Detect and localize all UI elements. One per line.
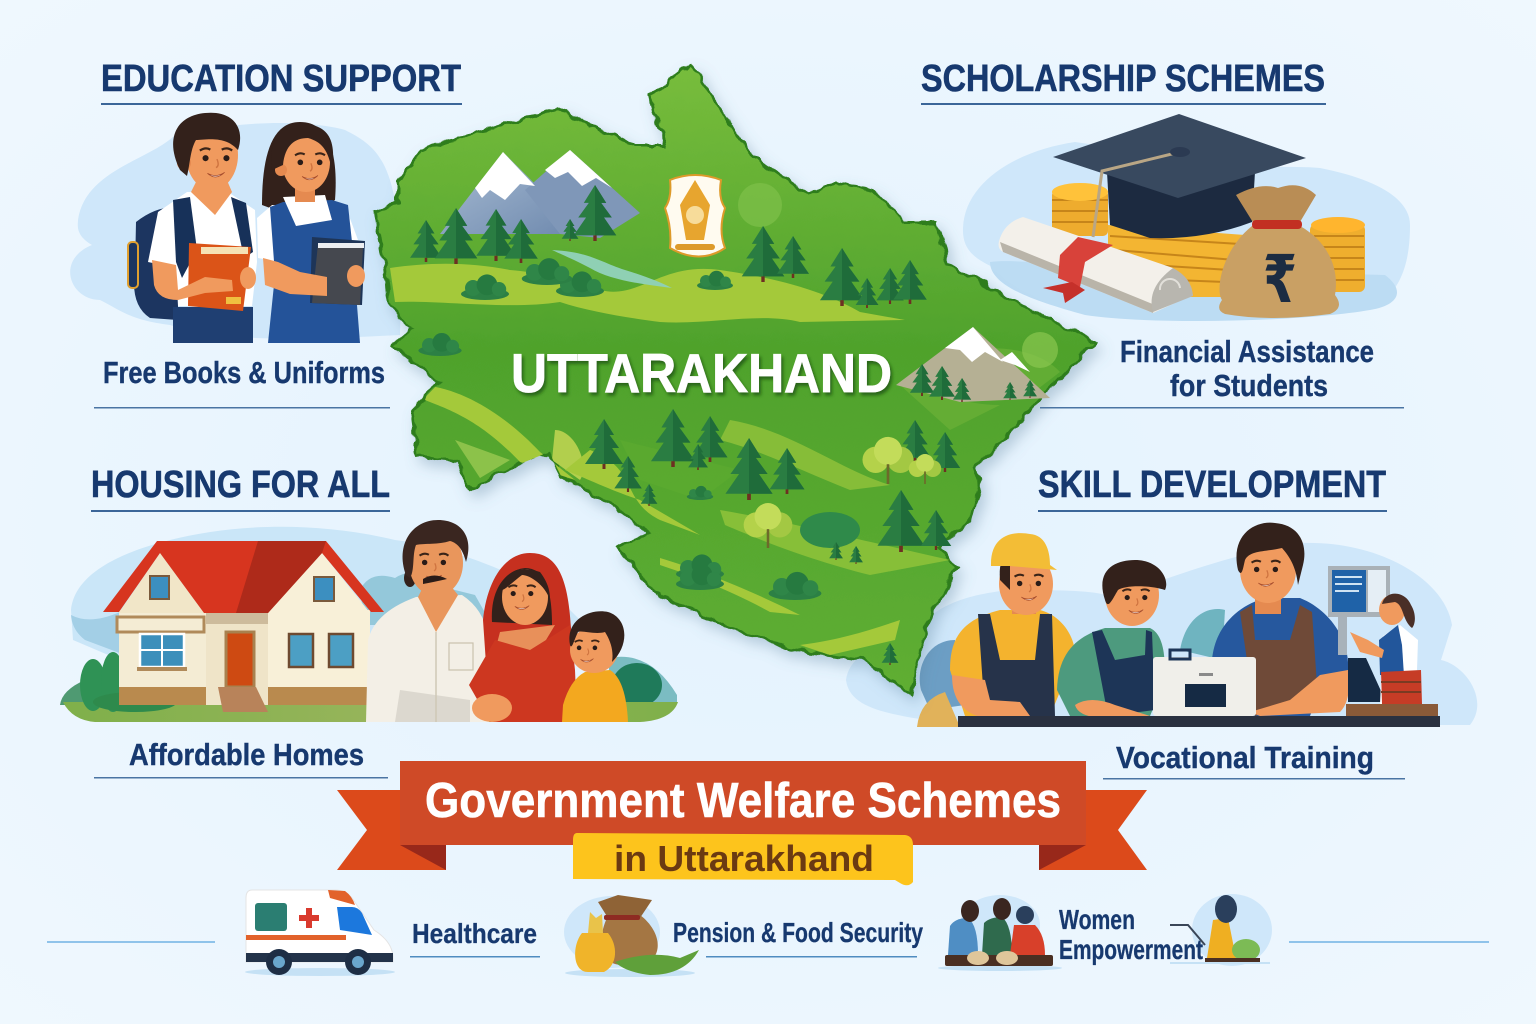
caption: Financial Assistance: [1120, 334, 1374, 369]
woman in red sari: [469, 553, 577, 722]
map of Uttarakhand: [375, 64, 1094, 695]
child: [562, 611, 628, 722]
ribbon folds: [400, 845, 1086, 870]
panel: scholarship schemes: [921, 58, 1410, 408]
background blob: [963, 142, 1410, 300]
trainer: [1212, 523, 1349, 716]
heading: SCHOLARSHIP SCHEMES: [921, 58, 1325, 100]
icon: ambulance: [245, 890, 395, 976]
shrubs: [917, 609, 1225, 727]
heading: HOUSING FOR ALL: [91, 464, 390, 506]
heading: SKILL DEVELOPMENT: [1038, 464, 1386, 506]
diploma scroll: [999, 217, 1193, 313]
map title: UTTARAKHAND: [511, 342, 892, 404]
sub-banner: in Uttarakhand: [614, 838, 874, 879]
background blob: [71, 527, 600, 660]
icon: people group: [938, 895, 1062, 971]
map landmass: [375, 64, 1094, 695]
forest north: [410, 185, 927, 356]
training machine: [1153, 650, 1256, 716]
work table: [958, 704, 1440, 727]
title ribbon: [337, 761, 1147, 885]
icon: woman at work: [1170, 894, 1272, 966]
background blob: [846, 543, 1477, 725]
caption: Free Books & Uniforms: [103, 355, 385, 390]
graduation cap: [1053, 114, 1306, 238]
label: women empowerment: [1059, 904, 1203, 965]
house: [103, 541, 384, 712]
caption: Vocational Training: [1116, 740, 1374, 775]
ribbon left tail: [337, 790, 446, 870]
map terrain patches: [390, 183, 1060, 655]
hills and ground: [60, 573, 678, 722]
coin stacks: [1052, 183, 1365, 297]
label: women empowerment: Empowerment: [1059, 934, 1203, 965]
money bag: [1219, 185, 1339, 318]
ribbon body: [400, 761, 1086, 845]
heading: EDUCATION SUPPORT: [101, 58, 461, 100]
background blob: [70, 123, 401, 339]
caption: Affordable Homes: [129, 737, 364, 772]
rupee sign: ₹: [1263, 241, 1297, 318]
icon: grain sack and pot: [564, 895, 699, 977]
caption: [1040, 334, 1404, 408]
ground shadow: [990, 261, 1397, 321]
student girl: [257, 122, 365, 343]
young trainee: [1057, 560, 1166, 718]
footer: services row: [47, 890, 1489, 977]
caption: for Students: [1170, 368, 1328, 403]
footer right rule: [1289, 941, 1489, 943]
panel: skill development: [846, 464, 1477, 780]
label: women empowerment: Women: [1059, 904, 1135, 935]
label: pension and food security: Pension & Food Security: [673, 917, 923, 948]
forest south: [585, 409, 960, 665]
student boy: [128, 113, 257, 343]
man: [366, 520, 489, 722]
label: healthcare: Healthcare: [412, 918, 537, 949]
mountains north-west: [440, 150, 640, 238]
footer left rule: [47, 941, 215, 943]
sub-banner: [573, 833, 913, 885]
ribbon heading: Government Welfare Schemes: [425, 774, 1061, 828]
mountain east: [896, 327, 1050, 402]
laptop: [1348, 658, 1386, 702]
worker in helmet: [950, 533, 1075, 718]
ribbon right tail: [1039, 790, 1147, 870]
panel: housing for all: [60, 464, 678, 778]
river: [552, 250, 672, 288]
woman instructor: [1350, 594, 1422, 704]
panel: education support: [70, 58, 462, 408]
state emblem: [665, 175, 725, 256]
display screen: [1328, 566, 1390, 655]
